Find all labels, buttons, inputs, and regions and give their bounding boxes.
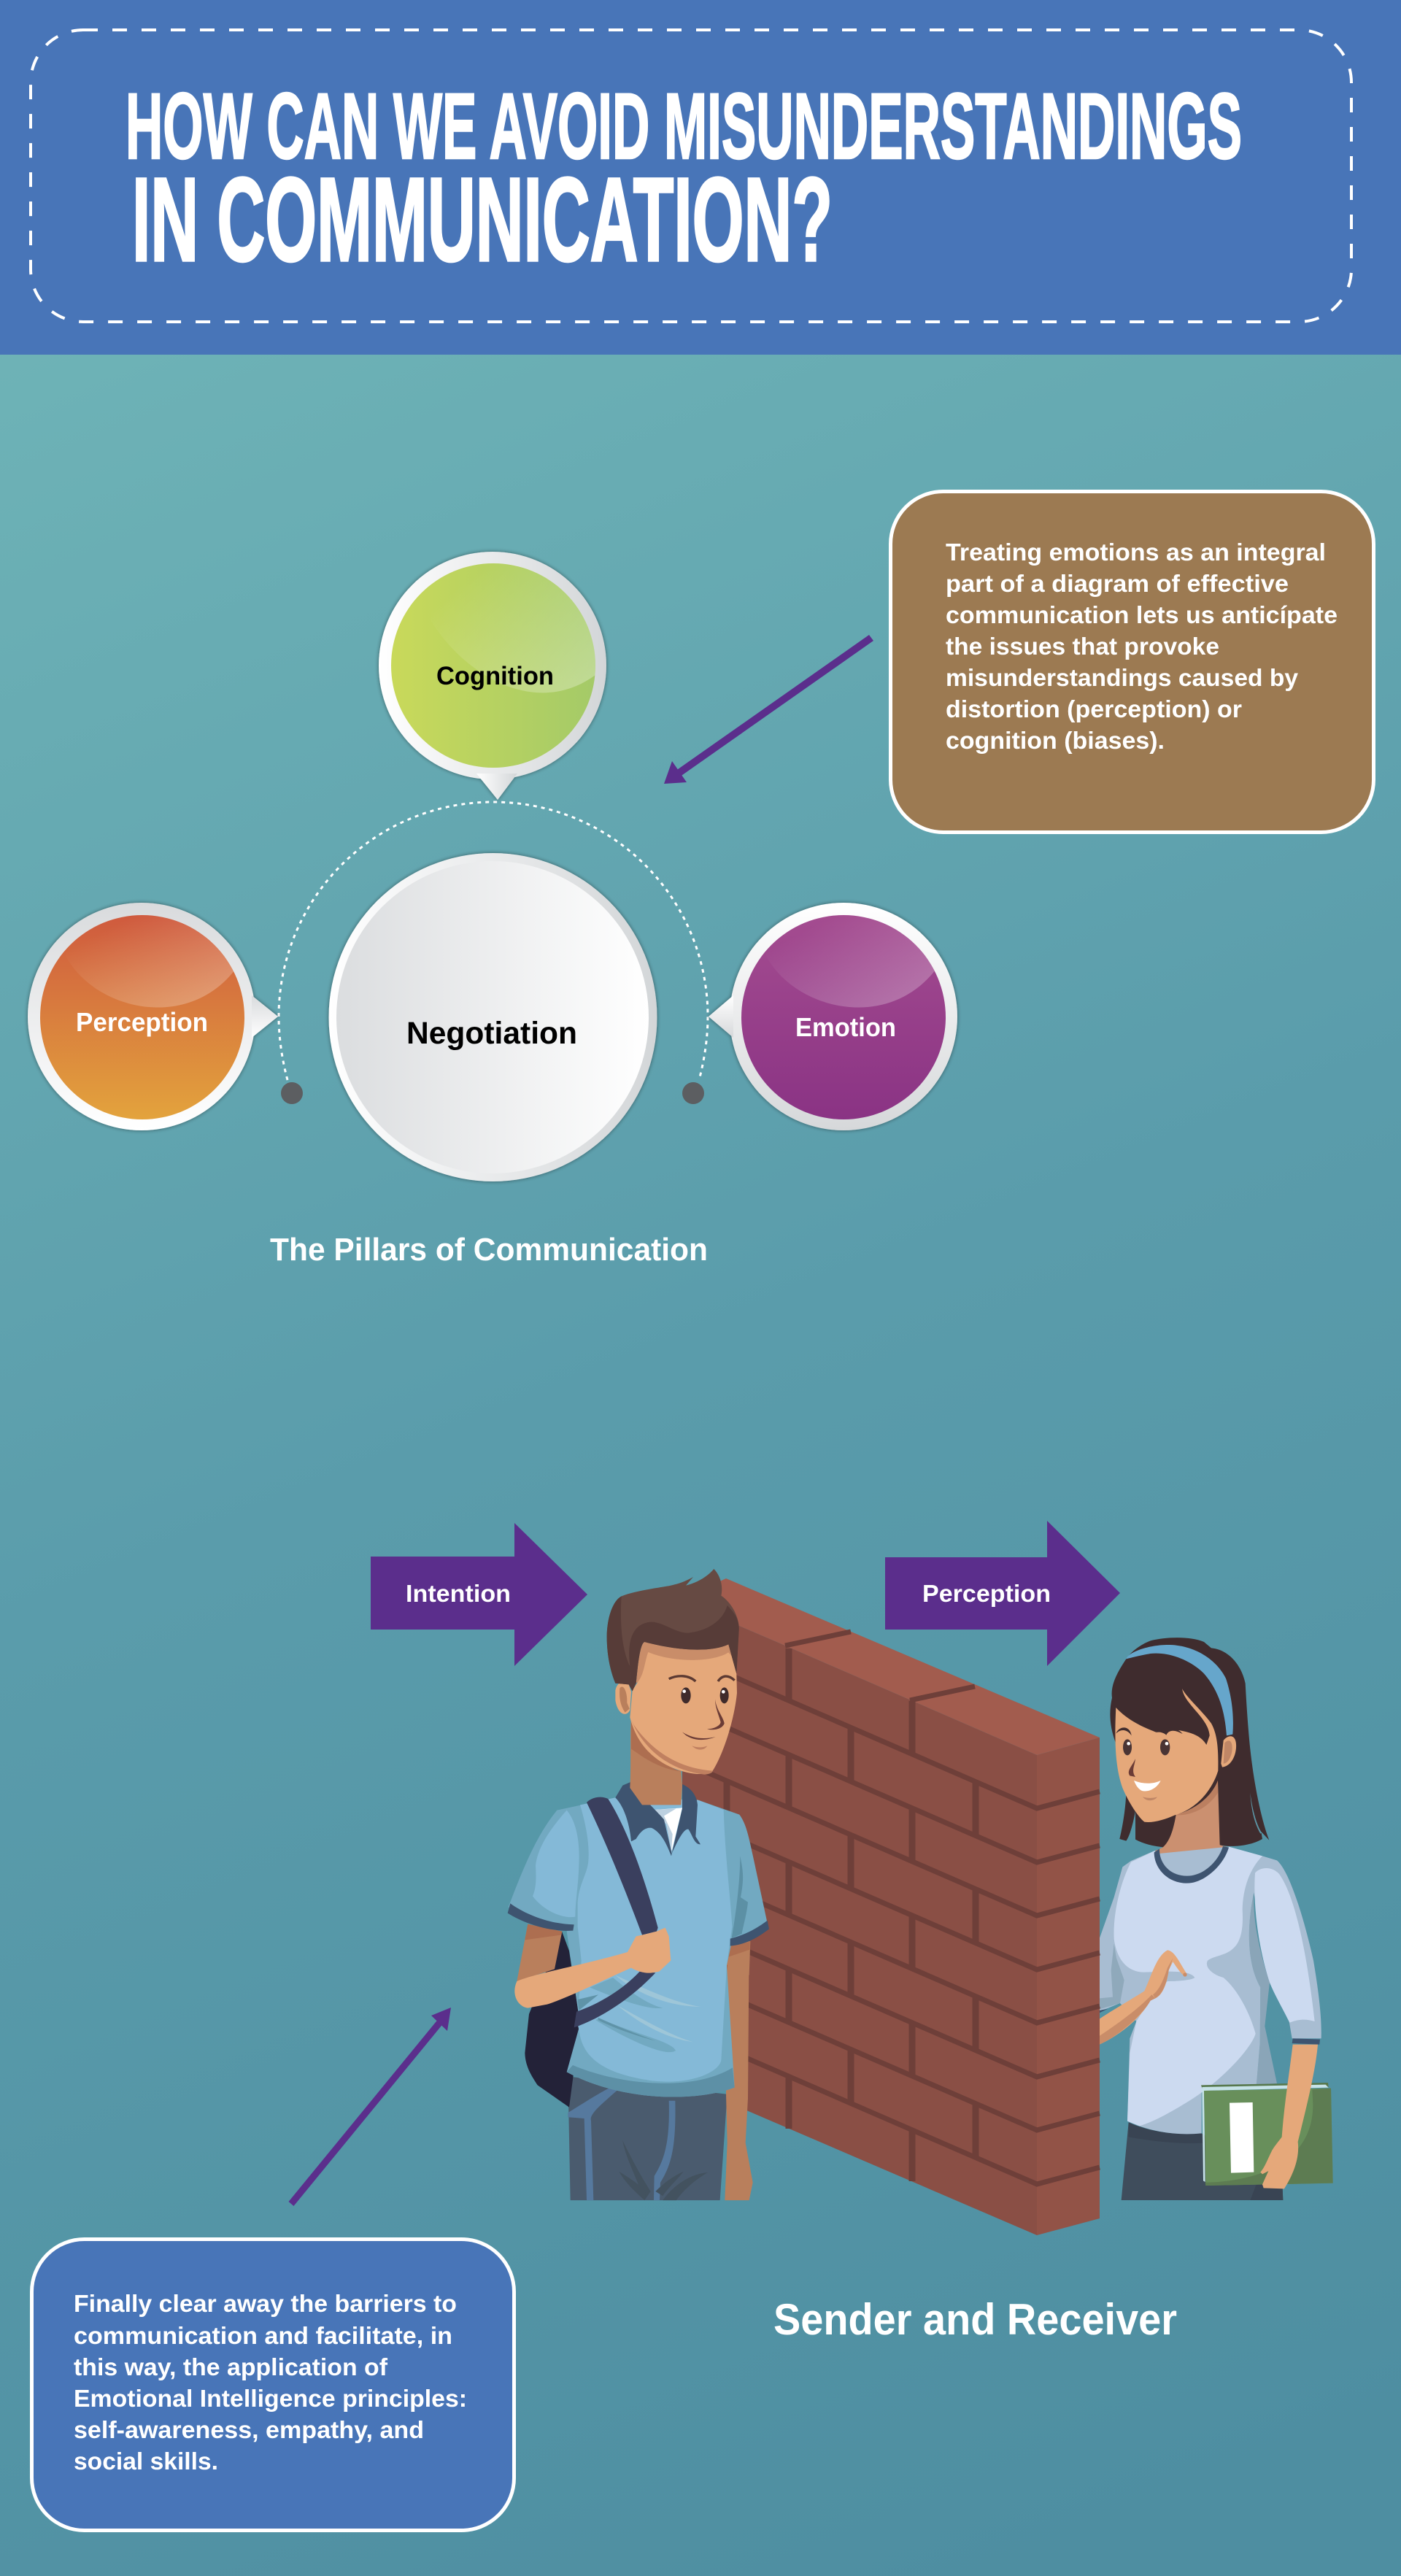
callout: barriers: communication and facilitate, in — [74, 2322, 452, 2349]
nose — [707, 1699, 725, 1729]
mortar lines — [682, 1632, 1100, 2184]
skirt — [1122, 2122, 1283, 2200]
pants folds — [619, 2140, 708, 2200]
shirt shadow base — [1100, 1847, 1321, 2134]
right arm — [1260, 2045, 1318, 2189]
eyes — [1123, 1739, 1170, 1755]
title: IN COMMUNICATION? — [132, 153, 833, 286]
eyes — [681, 1687, 729, 1703]
callout: emotions: the issues that provoke — [946, 633, 1219, 660]
callout: barriers: self-awareness, empathy, and — [74, 2416, 424, 2443]
bubble: Cognition — [379, 552, 606, 800]
sleeve light — [1254, 1868, 1315, 2023]
callout: emotions: Treating emotions as an integral — [946, 539, 1326, 566]
arrow: callout to sender — [289, 2008, 451, 2206]
forehead shadow — [636, 1642, 735, 1684]
callout: emotions: distortion (perception) or — [946, 695, 1242, 722]
body — [1100, 1824, 1333, 2200]
illustration: man sender — [508, 1569, 769, 2200]
neck — [630, 1717, 682, 1805]
headband — [1126, 1645, 1233, 1735]
pants stripes — [568, 2088, 675, 2200]
dashed arc — [279, 802, 708, 1080]
shirt base — [509, 1797, 768, 2097]
bubble: Emotion: Emotion — [795, 1012, 896, 1042]
callout: barriers: social skills. — [74, 2448, 218, 2475]
shirt light — [578, 1797, 732, 2082]
face — [1115, 1689, 1218, 1822]
book — [1201, 2083, 1333, 2186]
back shade — [1249, 1892, 1277, 2085]
callout: barriers — [32, 2239, 514, 2531]
callout: emotions: misunderstandings caused by — [946, 664, 1299, 691]
arrow: Intention — [371, 1523, 587, 1666]
arc end dots — [281, 1082, 704, 1104]
left arm — [1100, 1950, 1187, 2045]
arrow: Perception — [885, 1521, 1120, 1666]
callout: barriers: Emotional Intelligence principles: — [74, 2385, 467, 2412]
bag strap — [574, 1797, 658, 2027]
arrow: Intention: Intention — [406, 1580, 511, 1607]
wall top — [715, 1578, 1100, 1755]
cuffs — [508, 1903, 769, 1946]
header banner — [0, 0, 1401, 355]
callout: barriers: this way, the application of — [74, 2353, 388, 2380]
legs — [568, 1940, 753, 2200]
side shade — [1100, 1943, 1124, 2009]
upper arm — [517, 1924, 562, 1981]
bubble: Perception: Perception — [76, 1007, 208, 1037]
hair shade — [607, 1596, 739, 1691]
face — [630, 1642, 737, 1774]
wall side face — [1037, 1738, 1100, 2235]
callout: barriers: Finally clear away the barriers to — [74, 2290, 457, 2317]
illustration: brick wall — [682, 1578, 1100, 2235]
sleeve wrinkles — [1294, 2020, 1317, 2033]
bubble: Negotiation — [328, 853, 657, 1181]
torso — [508, 1782, 769, 2108]
nose — [1129, 1759, 1135, 1777]
wall front face — [682, 1599, 1037, 2235]
eyebrows — [669, 1676, 735, 1681]
bubble: Cognition: Cognition — [436, 662, 554, 690]
forearm — [514, 1928, 671, 2008]
illustration: woman receiver — [1100, 1638, 1333, 2200]
head — [607, 1569, 739, 1805]
right arm shade — [727, 1941, 750, 1975]
shirt light — [1114, 1847, 1262, 2126]
shirt hem — [567, 2065, 735, 2097]
callout: emotions: cognition (biases). — [946, 727, 1165, 754]
undershirt — [655, 1808, 682, 1851]
ear — [1221, 1736, 1236, 1767]
head — [1115, 1645, 1236, 1822]
collar — [1154, 1846, 1229, 1883]
jaw shade — [631, 1720, 713, 1775]
mouth — [682, 1732, 716, 1740]
title — [126, 74, 1242, 286]
shirt wrinkles — [590, 1978, 676, 2052]
sleeve fold — [732, 1856, 748, 1938]
hair — [607, 1569, 739, 1691]
callout: emotions — [890, 492, 1373, 832]
left sleeve light — [533, 1810, 579, 1917]
ear — [615, 1681, 631, 1714]
hair and neck — [1110, 1638, 1269, 1861]
dashed title frame — [31, 30, 1351, 322]
callout: emotions: communication lets us anticípate — [946, 601, 1338, 628]
neck base — [1154, 1824, 1229, 1877]
collar — [615, 1782, 700, 1856]
eyebrows — [1116, 1727, 1183, 1735]
bubble: Emotion — [709, 903, 957, 1130]
bubble: Negotiation: Negotiation — [406, 1016, 577, 1051]
arrow: callout to diagram — [664, 635, 873, 784]
arrow: Perception: Perception — [922, 1580, 1051, 1607]
backpack — [525, 1932, 580, 2108]
pants — [568, 2076, 727, 2200]
cuffs — [1100, 2009, 1320, 2045]
heading: pillars: The Pillars of Communication — [270, 1232, 708, 1268]
smile — [1134, 1781, 1161, 1791]
arm right — [725, 1940, 753, 2200]
callout: emotions: part of a diagram of effective — [946, 570, 1289, 597]
heading: sender and receiver: Sender and Receiver — [773, 2295, 1177, 2344]
bubble: Perception — [28, 903, 278, 1130]
